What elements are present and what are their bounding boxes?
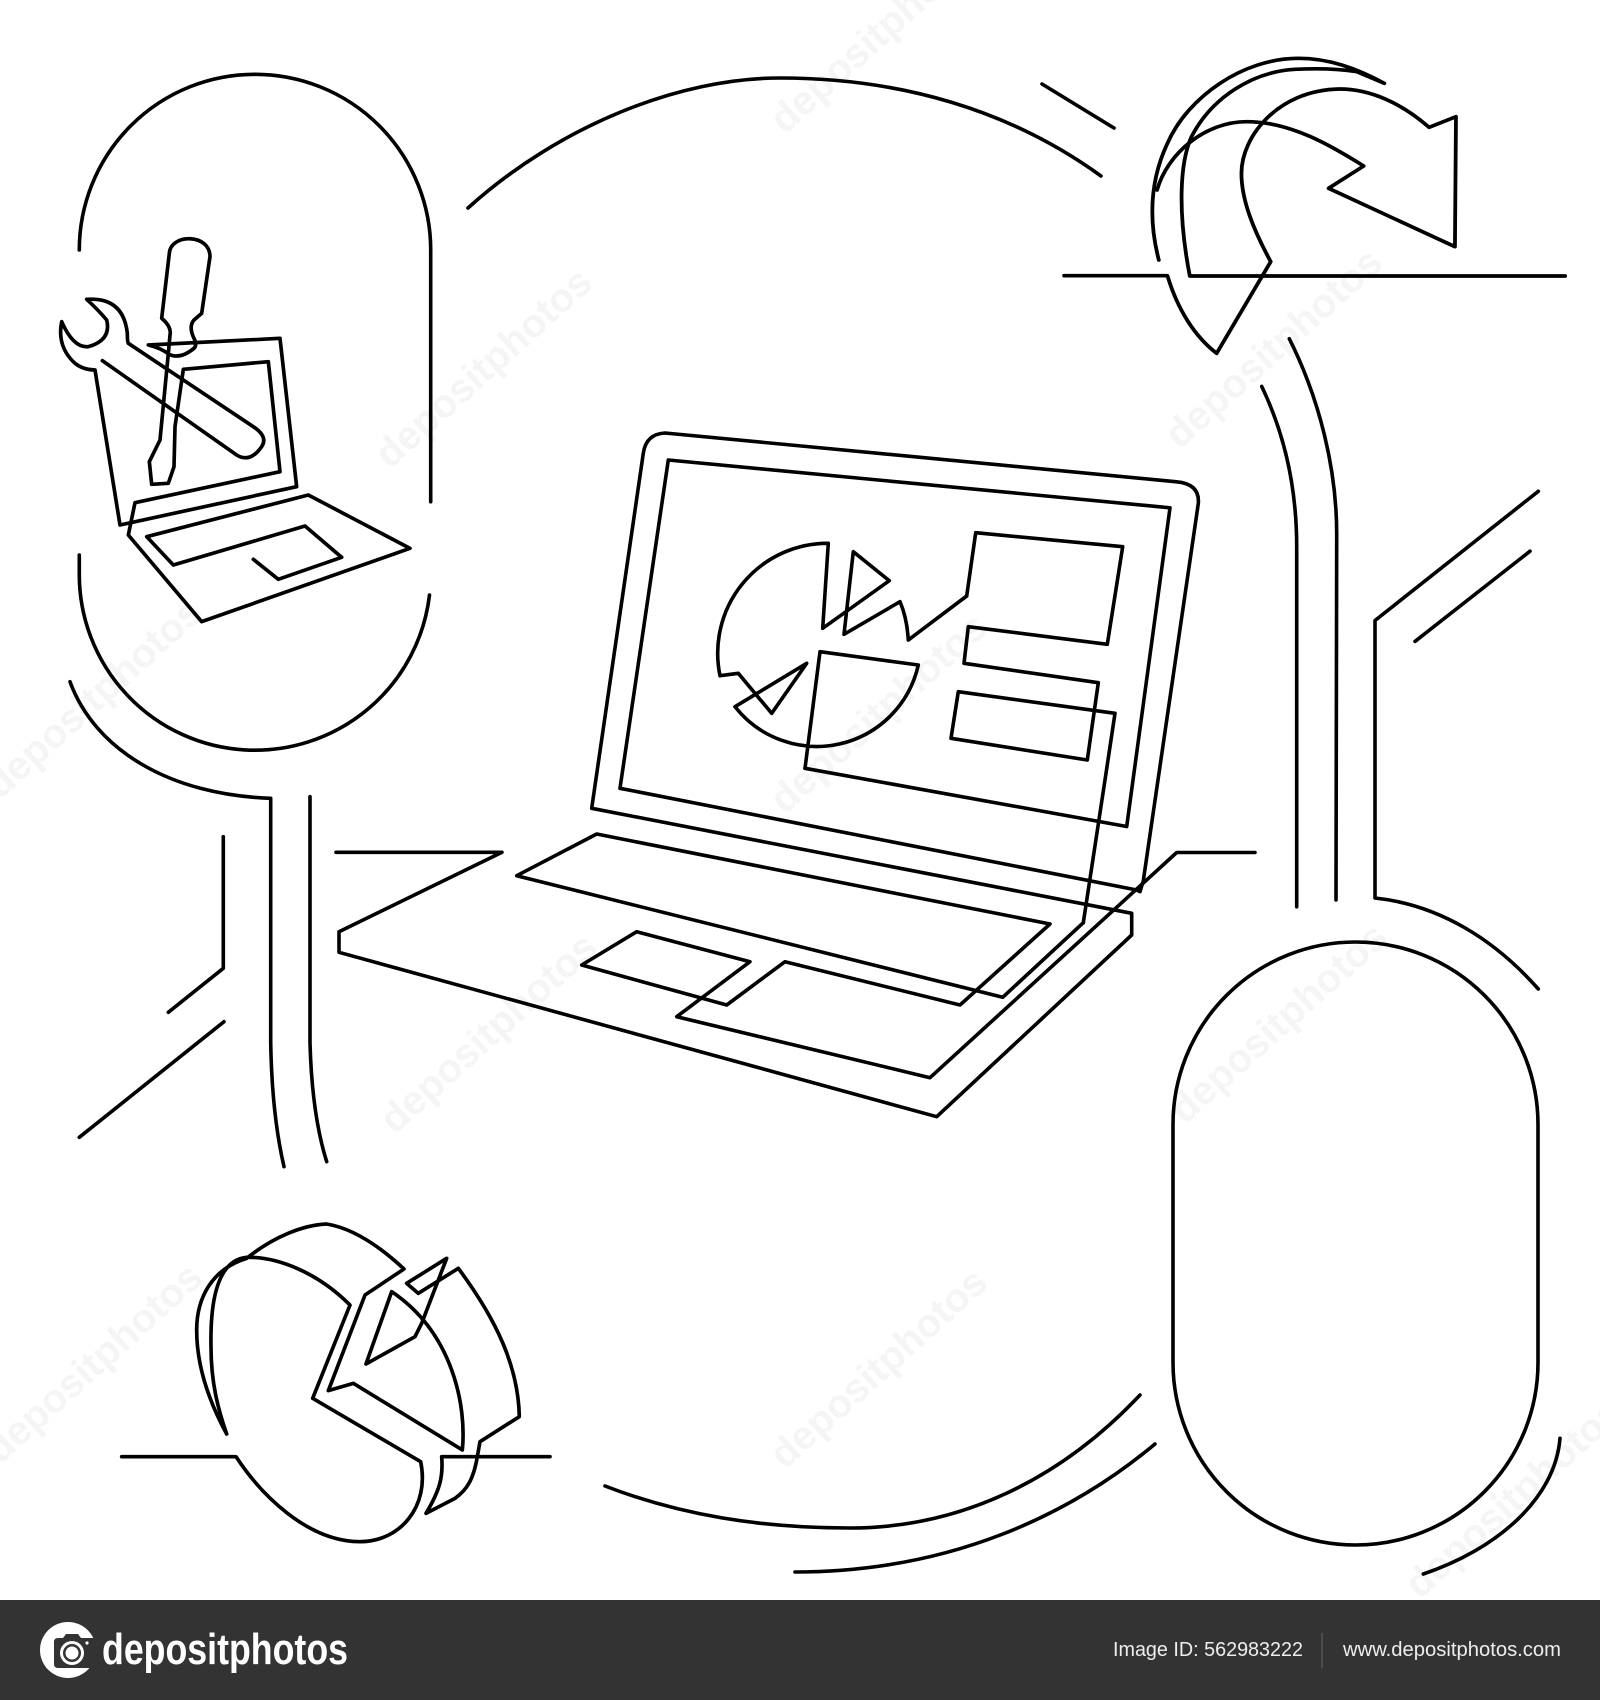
panel: lower-left connector lines	[70, 682, 327, 1167]
website url: www.depositphotos.com	[1342, 1639, 1561, 1661]
pie chart on screen	[718, 543, 967, 768]
panel: top arcs	[468, 78, 1114, 208]
panel: lower-right arc	[1423, 1438, 1560, 1574]
watermark pattern: depositphotos	[1157, 240, 1391, 457]
data blocks on screen	[951, 533, 1123, 923]
icon: curved arrow	[1064, 58, 1565, 353]
footer banner	[0, 1600, 1600, 1700]
watermark pattern: depositphotos	[372, 925, 606, 1142]
icon: laptop with wrench and screwdriver	[61, 239, 410, 622]
laptop base and lid outline	[336, 433, 1198, 1117]
watermark pattern: depositphotos	[367, 260, 601, 477]
image id: Image ID: 562983222	[1113, 1639, 1303, 1661]
panel: bottom arcs	[605, 1395, 1155, 1572]
watermark pattern: depositphotos	[1162, 915, 1396, 1132]
panel: right connector lines	[1262, 339, 1538, 989]
panel: right empty pill	[1173, 942, 1538, 1545]
panel: left pill with tools	[79, 74, 431, 750]
keyboard and touchpad	[517, 834, 1255, 1078]
watermark pattern: depositphotos	[762, 605, 996, 822]
logo wordmark: depositphotos	[102, 1625, 348, 1674]
icon: exploded pie chart	[122, 1224, 550, 1542]
watermark pattern: depositphotos	[762, 1260, 996, 1477]
separator	[1322, 1633, 1323, 1668]
icon: camera logo	[40, 1622, 96, 1678]
central laptop	[336, 433, 1255, 1117]
